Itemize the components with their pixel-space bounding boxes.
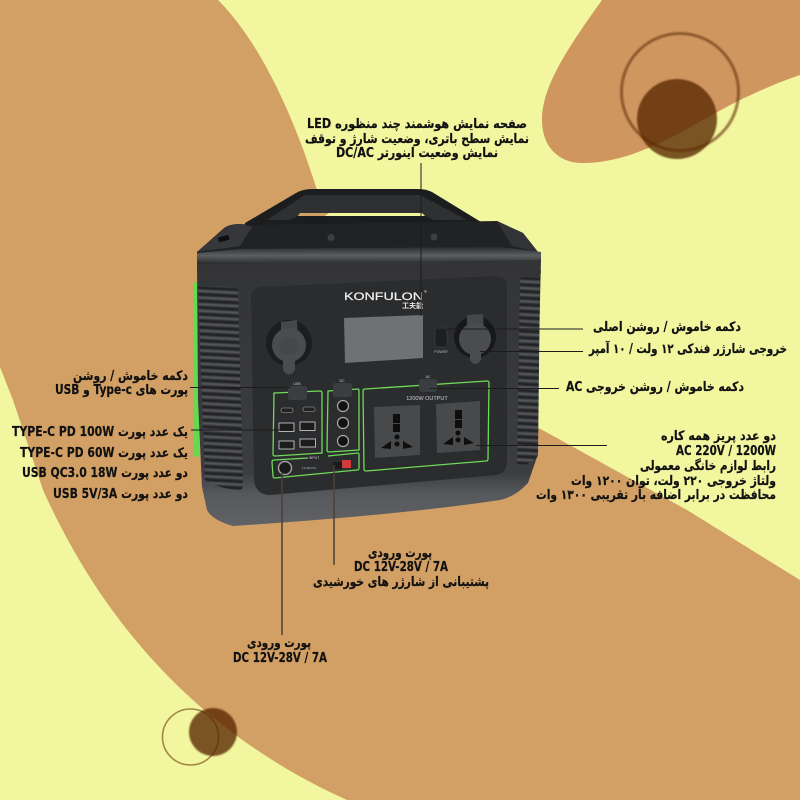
main power button: POWER: [434, 350, 448, 354]
text: Anderson input and solar: پورت ورودی: [368, 546, 432, 561]
text: USB power button: [55, 369, 188, 398]
text: AC sockets description: ولتاژ خروجی ۲۲۰ ولت، توان ۱۲۰۰ وات: [571, 474, 776, 489]
text: AC sockets description: [536, 429, 776, 503]
background: top-right blob: [542, 0, 800, 163]
text: USB port list: [12, 425, 188, 502]
text: USB port list: یک عدد پورت TYPE-C PD 60W: [20, 446, 188, 461]
text: LED display description: نمایش سطح باتری، وضعیت شارژ و توقف: [305, 132, 529, 147]
text: USB power button: پورت های Type-c و USB: [55, 383, 188, 398]
leader line: DC input jack: [281, 472, 283, 635]
top shell bolts: [328, 234, 438, 241]
left ribs: [198, 286, 243, 490]
power station device: [194, 189, 541, 526]
side green strip: [194, 282, 199, 457]
text: USB power button: دکمه خاموش / روشن: [73, 369, 188, 384]
text: AC sockets description: دو عدد پریز همه کاره: [661, 429, 776, 444]
AC socket right: [436, 401, 480, 453]
text: main power button: دکمه خاموش / روشن اصلی: [593, 320, 741, 335]
decoration: top-right circles: [622, 34, 738, 159]
logo: 工夫能: [402, 301, 423, 310]
USB port group: [273, 382, 322, 456]
display screen: [344, 315, 423, 363]
AC switch: [419, 379, 437, 392]
text: DC input jack: DC 12V-28V / 7A: [233, 651, 327, 666]
Type-C ports: [281, 408, 293, 412]
input port group: INPUT: [309, 456, 320, 460]
logo: KONFULON: [344, 291, 423, 303]
text: AC button: دکمه خاموش / روشن خروجی AC: [566, 380, 744, 395]
leader line: Anderson input: [333, 465, 335, 565]
top shell: [197, 221, 541, 273]
input port group: 12-28V/7A: [302, 466, 316, 470]
text: USB port list: دو عدد پورت USB 5V/3A: [53, 487, 188, 502]
leader line: AC switch: [430, 388, 559, 390]
USB switch: [288, 386, 307, 400]
AC socket left: [374, 405, 420, 458]
text: Anderson input and solar: پشتیبانی از شارژر های خورشیدی: [313, 575, 489, 590]
text: USB port list: دو عدد پورت USB QC3.0 18W: [22, 466, 188, 481]
text: Anderson input and solar: DC 12V-28V / 7A: [354, 560, 448, 575]
DC input jack: [278, 462, 292, 474]
DC port group: [327, 379, 359, 452]
text: LED display description: نمایش وضعیت اینورتر DC/AC: [336, 146, 498, 161]
text: LED display description: [305, 117, 529, 161]
decoration: bottom-left circles: [162, 708, 237, 765]
right cigarette socket: [454, 314, 496, 364]
left cigarette socket: [266, 320, 312, 374]
DC port group: DC: [339, 379, 345, 383]
AC output group: 1200W OUTPUT: [406, 396, 448, 402]
leader line: cigarette socket: [480, 350, 583, 352]
text: Anderson input and solar: [313, 546, 489, 590]
DC switch: [333, 383, 352, 397]
top shell corner grip right: [497, 221, 538, 252]
text: LED display description: صفحه نمایش هوشمند چند منظوره LED: [307, 117, 527, 132]
Anderson connector: [333, 462, 342, 469]
DC jacks: [338, 400, 348, 412]
input port group: [272, 453, 359, 478]
logo: [344, 289, 427, 310]
text: DC input jack: [233, 636, 327, 666]
AC output group: AC: [426, 375, 431, 379]
top shell corner grip left: [197, 224, 252, 252]
USB-A ports: [279, 423, 294, 432]
leader line: USB switch: [190, 386, 290, 388]
leader line: AC sockets: [476, 444, 607, 446]
text: AC sockets description: AC 220V / 1200W: [676, 444, 776, 459]
top highlight band: [197, 247, 541, 266]
AC output group: [363, 375, 489, 471]
handle: [245, 189, 481, 232]
control panel: [251, 276, 507, 495]
right ribs: [517, 277, 540, 466]
leader line: main power button: [447, 328, 583, 330]
leader line: USB ports: [191, 429, 280, 431]
text: DC input jack: پورت ورودی: [247, 636, 311, 651]
text: USB port list: یک عدد پورت TYPE-C PD 100W: [12, 425, 188, 440]
main body: [197, 260, 541, 526]
logo: ®: [424, 289, 427, 294]
leader line: LED display: [420, 163, 422, 316]
USB port group: USB: [293, 382, 301, 386]
main power button: [434, 328, 448, 354]
